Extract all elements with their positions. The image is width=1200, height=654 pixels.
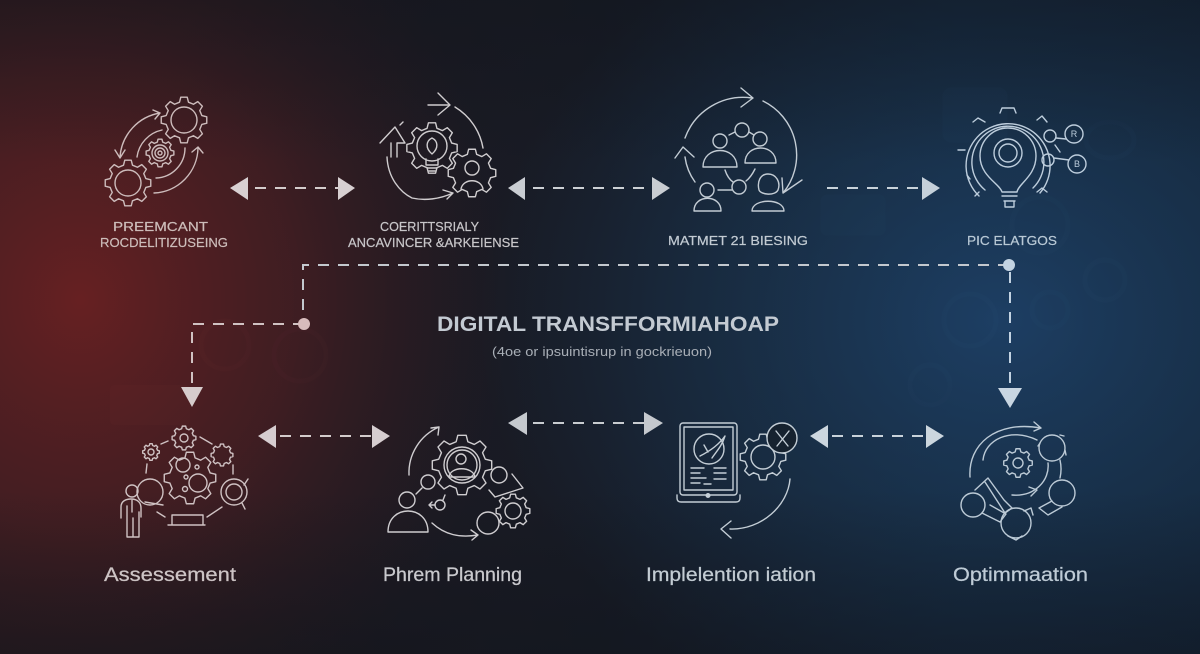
- icon: lightbulb and person gears: [380, 93, 496, 199]
- icon: lightbulb in gear: [958, 108, 1086, 207]
- arrow: double headed bottom 1: [258, 425, 390, 448]
- label: top step 2: [348, 220, 519, 250]
- label: top step 3: MATMET 21 BIESING: [668, 234, 808, 248]
- connector: dashed line down to optimisation: [998, 272, 1022, 408]
- label: assessment: Assessement: [104, 565, 237, 586]
- label: optimisation: Optimmaation: [953, 565, 1088, 586]
- arrow: right top 3: [827, 177, 940, 200]
- icon: implementation tablet and gear: [677, 423, 797, 538]
- label: top step 4: PIC ELATGOS: [967, 234, 1057, 248]
- icon: optimisation: [961, 422, 1075, 540]
- label: implementation: Implelention iation: [646, 565, 816, 586]
- label: planning: Phrem Planning: [383, 565, 522, 586]
- label: top step 1: PREEMCANT: [113, 220, 208, 234]
- arrow: double headed top 1: [230, 177, 355, 200]
- arrow: double headed bottom 2: [508, 412, 663, 435]
- subtitle: (4oe or ipsuintisrup in gockrieuon): [492, 344, 712, 359]
- arrow: double headed top 2: [508, 177, 670, 200]
- label: top step 1: [100, 220, 228, 250]
- label: top step 1: ROCDELITIZUSEING: [100, 236, 228, 250]
- label: top step 2: COERITTSRIALY: [380, 220, 480, 234]
- arrow: double headed bottom 3: [810, 425, 944, 448]
- text: node letters: [1071, 129, 1080, 169]
- text: node letters: B: [1074, 159, 1080, 169]
- icon: team cycle: [675, 88, 802, 211]
- icon: planning: [388, 427, 530, 540]
- faint background shapes: [110, 90, 1134, 425]
- connector: dashed route from top right to assessment: [181, 259, 1015, 407]
- label: top step 2: ANCAVINCER &ARKEIENSE: [348, 236, 519, 250]
- text: node letters: R: [1071, 129, 1078, 139]
- icon: prioritising gears: [105, 97, 207, 206]
- title: DIGITAL TRANSFFORMIAHOAP: [437, 313, 779, 336]
- icon: assessment: [121, 426, 248, 537]
